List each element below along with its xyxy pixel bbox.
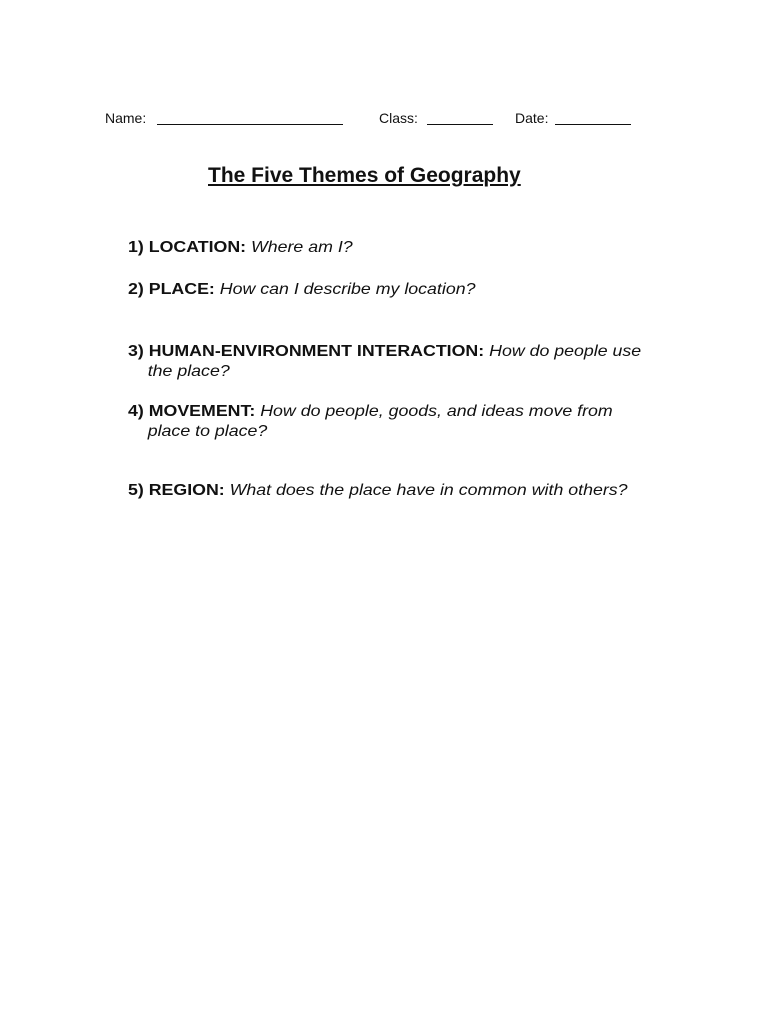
list: five themes [128, 239, 641, 499]
title: The Five Themes of Geography [208, 164, 521, 187]
item 2: 2) PLACE: How can I describe my location? [128, 281, 475, 298]
header: name class date fields: Class: [379, 110, 418, 126]
header: name class date fields: Date: [515, 110, 548, 126]
item 1: 1) LOCATION: Where am I? [128, 239, 353, 256]
header: name class date fields [105, 110, 631, 126]
item 3 [128, 343, 641, 380]
item 4: place to place? [148, 423, 267, 440]
header: name class date fields: Name: [105, 110, 146, 126]
item 3: the place? [148, 363, 230, 380]
item 4 [128, 403, 613, 440]
item 4: 4) MOVEMENT: How do people, goods, and ideas move from [128, 403, 613, 420]
item 3: 3) HUMAN-ENVIRONMENT INTERACTION: How do people use [128, 343, 641, 360]
item 5: 5) REGION: What does the place have in common with others? [128, 482, 627, 499]
